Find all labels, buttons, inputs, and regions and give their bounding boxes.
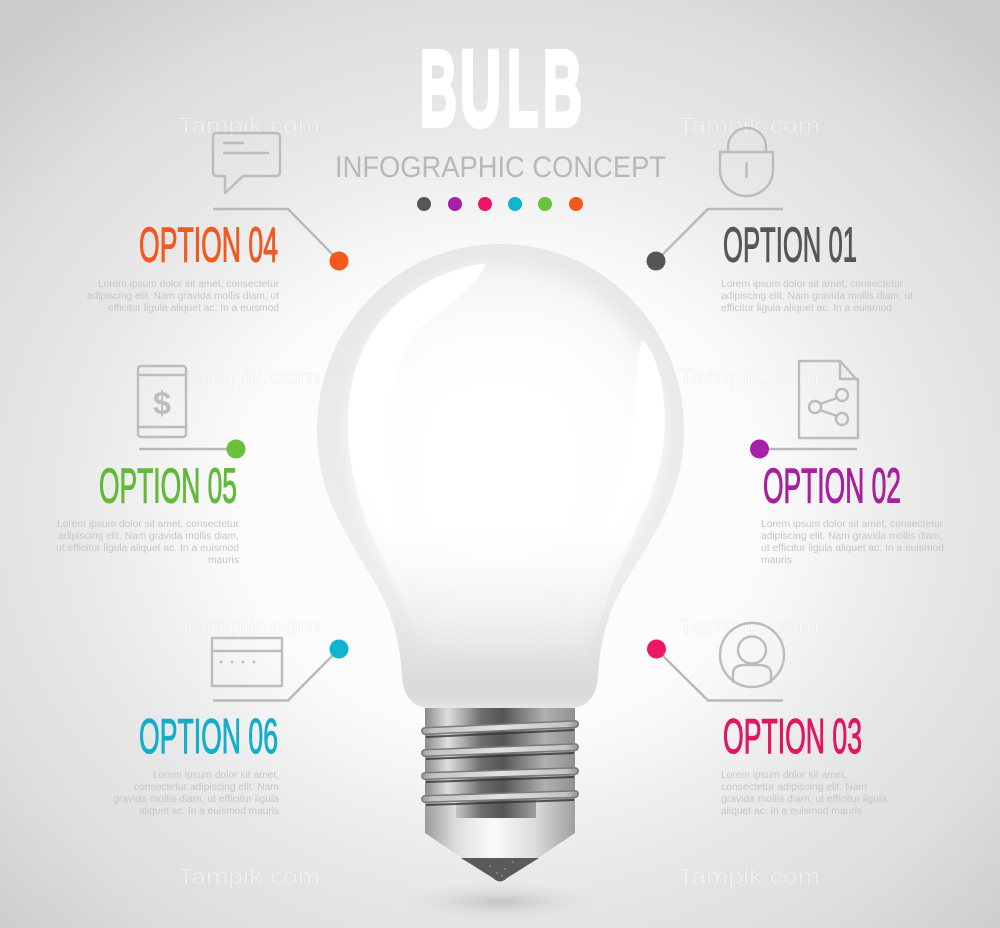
icon: tablet with dollar: $ <box>153 385 171 421</box>
base dark band <box>425 708 575 800</box>
base lower shell <box>425 790 575 858</box>
watermarks: Tampik.com <box>678 864 820 889</box>
option 04 heading: OPTION 04 <box>139 218 278 272</box>
option 05 text: Lorem ipsum dolor sit amet, consectetur <box>57 519 240 530</box>
option 03 text: gravida mollis diam, ut efficitur ligula <box>721 794 887 805</box>
connector and marker: option 03 <box>647 640 783 700</box>
option 06 text: consectetur adipiscing elit. Nam <box>134 782 279 793</box>
watermarks: Tampik.com <box>178 864 320 889</box>
icon: padlock <box>720 128 773 196</box>
base side bands <box>425 800 575 818</box>
title <box>420 28 582 148</box>
icon: user profile <box>720 623 784 687</box>
neck shading <box>396 599 604 704</box>
option 06 heading: OPTION 06 <box>139 710 278 764</box>
option 04 text <box>87 279 280 314</box>
watermarks: Tampik.com <box>678 614 820 639</box>
option 02 text: ut efficitur ligula aliquet ac. In a euismod <box>761 543 944 554</box>
option 05 text <box>56 519 240 566</box>
option 04 text: Lorem ipsum dolor sit amet, consectetur <box>98 279 280 290</box>
option 03 heading: OPTION 03 <box>723 710 862 764</box>
option 04 text: efficitur ligula aliquet ac. In a euismod <box>108 303 279 314</box>
option 01 text: Lorem ipsum dolor sit amet, consectetur <box>721 279 904 290</box>
connector and marker: option 04 <box>213 209 348 270</box>
option 03 text: aliquet ac. In a euismod mauris <box>721 806 862 817</box>
subtitle: INFOGRAPHIC CONCEPT <box>335 151 666 184</box>
option 01 text: adipiscing elit. Nam gravida mollis diam, ut <box>721 291 913 302</box>
option 03 text <box>721 770 887 817</box>
option 05 block <box>56 460 240 566</box>
option 02 text: Lorem ipsum dolor sit amet, consectetur <box>761 519 944 530</box>
connector and marker: option 01 <box>646 209 783 270</box>
base central band <box>456 800 536 818</box>
option 05 heading: OPTION 05 <box>99 460 237 514</box>
colour dots row <box>417 197 583 211</box>
option 05 text: adipiscing elit. Nam gravida mollis diam, <box>58 531 239 542</box>
option 01 heading: OPTION 01 <box>723 218 857 272</box>
option 06 text: aliquet ac. In a euismod mauris <box>139 806 279 817</box>
right highlight <box>568 341 665 675</box>
watermarks: Tampik.com <box>678 364 820 389</box>
watermarks <box>178 113 820 889</box>
option 06 block <box>113 710 279 817</box>
option 01 text <box>721 279 913 314</box>
screw base <box>425 708 575 882</box>
bulb inner glow <box>349 262 665 660</box>
option 02 text <box>761 519 944 566</box>
bulb shadow <box>388 880 612 924</box>
title: B <box>543 28 582 148</box>
icon: speech bubble <box>213 133 280 193</box>
option 02 block <box>761 460 944 566</box>
option 04 text: adipiscing elit. Nam gravida mollis diam, ut <box>87 291 279 302</box>
option 01 text: efficitur ligula aliquet ac. In a euismod <box>721 303 892 314</box>
option 03 text: consectetur adipiscing elit. Nam <box>721 782 867 793</box>
title: U <box>460 28 501 148</box>
light bulb <box>317 244 684 882</box>
connector and marker: option 05 <box>139 440 246 458</box>
bulb glass <box>317 244 684 708</box>
option 03 text: Lorem ipsum dolor sit amet, <box>721 770 847 781</box>
option 01 block <box>721 218 913 314</box>
watermarks: Tampik.com <box>178 113 320 138</box>
option 06 text: gravida mollis diam, ut efficitur ligula <box>113 794 279 805</box>
threads <box>425 724 575 799</box>
option 05 text: ut efficitur ligula aliquet ac. In a euismod <box>56 543 239 554</box>
connector and marker: option 02 <box>750 440 857 458</box>
watermarks: Tampik.com <box>178 614 320 639</box>
watermarks: Tampik.com <box>178 364 320 389</box>
connector and marker: option 06 <box>213 640 348 700</box>
icon: shared document <box>799 361 858 438</box>
option 05 text: mauris <box>208 555 239 566</box>
option 04 block <box>87 218 280 314</box>
left highlight <box>348 263 487 648</box>
option 02 text: mauris <box>761 555 792 566</box>
thread shadows <box>426 730 574 805</box>
thread rims <box>425 724 575 799</box>
icon: browser window <box>212 638 282 686</box>
title: B <box>420 28 457 148</box>
watermarks: Tampik.com <box>678 113 820 138</box>
option 06 text: Lorem ipsum dolor sit amet, <box>153 770 279 781</box>
icon: tablet with dollar <box>138 366 186 437</box>
option 02 text: adipiscing elit. Nam gravida mollis diam, <box>761 531 943 542</box>
option 03 block <box>721 710 887 817</box>
option 06 text <box>113 770 279 817</box>
title: L <box>507 28 538 148</box>
metal tip <box>461 858 539 882</box>
